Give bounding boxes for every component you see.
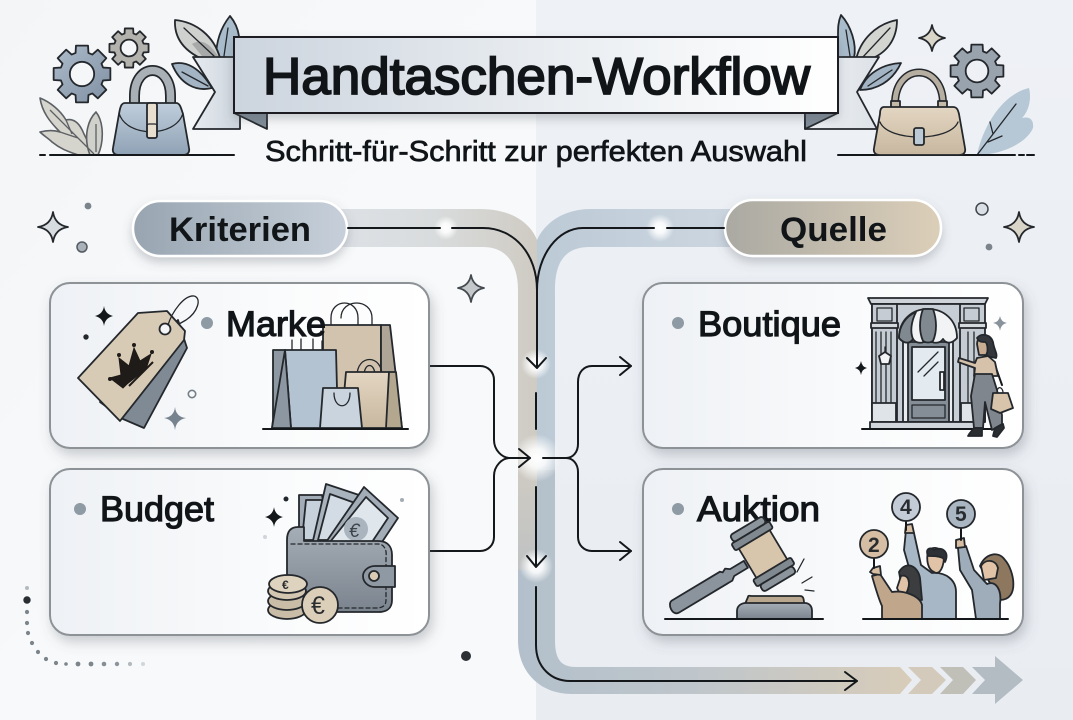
icon: upper right leaves xyxy=(838,15,901,90)
label: Budget xyxy=(100,490,214,529)
decorative sparkles and dots: left top xyxy=(38,203,91,252)
pill heading: Quelle: Quelle xyxy=(780,211,887,249)
panel: Marke xyxy=(50,283,429,448)
title banner xyxy=(193,37,879,129)
icon: bidders with paddles: 2 xyxy=(868,534,880,557)
pill heading: Kriterien xyxy=(133,201,347,256)
icon: blue handbag xyxy=(113,70,189,155)
subtitle: Schritt-für-Schritt zur perfekten Auswahl xyxy=(265,136,807,168)
flow band: Kriterien into main channel xyxy=(330,209,537,480)
icon: lower left leaves xyxy=(40,98,102,155)
panel: Auktion xyxy=(643,469,1023,638)
sparkles around boutique xyxy=(855,316,1007,375)
bullet xyxy=(672,503,684,515)
sparkles around tag xyxy=(83,306,196,430)
arrow: main line from Kriterien xyxy=(348,228,546,368)
header illustration: left gears, bag and leaves xyxy=(40,16,239,155)
panel: Budget xyxy=(50,469,429,635)
sparkles around wallet xyxy=(263,496,404,539)
label: Marke xyxy=(226,305,326,344)
header illustration: right gear, bag and leaves xyxy=(838,15,1034,155)
connectors from left cards xyxy=(430,366,530,551)
flow band: Quelle into main channel xyxy=(537,209,730,480)
pill heading: Quelle xyxy=(725,200,941,256)
decorative sparkles and dots: right top xyxy=(976,203,1034,250)
main channel dashes and arrows xyxy=(527,393,857,690)
right handbag xyxy=(874,72,965,155)
decorative dotted curve bottom left xyxy=(23,586,145,666)
shopper xyxy=(977,336,991,355)
label: Auktion xyxy=(697,490,820,529)
bullet xyxy=(74,503,86,515)
left ribbon tail xyxy=(193,57,240,129)
icon: small gear xyxy=(109,28,149,68)
pill heading: Kriterien: Kriterien xyxy=(169,211,311,249)
icon: right star xyxy=(919,25,945,51)
title: Handtaschen-Workflow xyxy=(263,48,810,106)
glow nodes xyxy=(434,214,674,583)
icon: right gear xyxy=(951,45,1003,97)
icon: blue leaf xyxy=(977,88,1033,155)
panel: Boutique xyxy=(643,283,1023,448)
ground line right xyxy=(838,154,1034,156)
icon: large gear xyxy=(54,46,110,102)
icon: gavel and sound block xyxy=(654,514,823,638)
icon: bidders with paddles xyxy=(860,493,1013,619)
right ribbon tail xyxy=(805,57,879,129)
main channel lower band with chevrons xyxy=(518,470,1023,704)
icon: boutique storefront with shopper xyxy=(862,298,1013,437)
icon: upper left leaves xyxy=(172,16,239,89)
decorative dot bottom centre xyxy=(461,651,471,661)
icon: euro coins: € xyxy=(311,592,325,620)
bullet xyxy=(672,317,684,329)
icon: price tags with crown xyxy=(78,296,198,428)
ground line left xyxy=(40,154,234,156)
connectors to right cards xyxy=(543,357,631,560)
decorative star between header and cards xyxy=(458,275,484,302)
icon: wallet with banknotes: € xyxy=(349,521,361,542)
banner plate xyxy=(234,37,838,113)
icon: shopping bags xyxy=(263,303,408,429)
icon: euro coins xyxy=(268,575,338,623)
icon: bidders with paddles: 5 xyxy=(955,503,967,526)
label: Boutique xyxy=(698,305,841,344)
icon: euro coins: € xyxy=(282,578,289,592)
icon: wallet with banknotes xyxy=(287,484,398,612)
arrow: main line from Quelle xyxy=(537,228,724,290)
bullet xyxy=(201,317,213,329)
icon: bidders with paddles: 4 xyxy=(900,496,912,519)
